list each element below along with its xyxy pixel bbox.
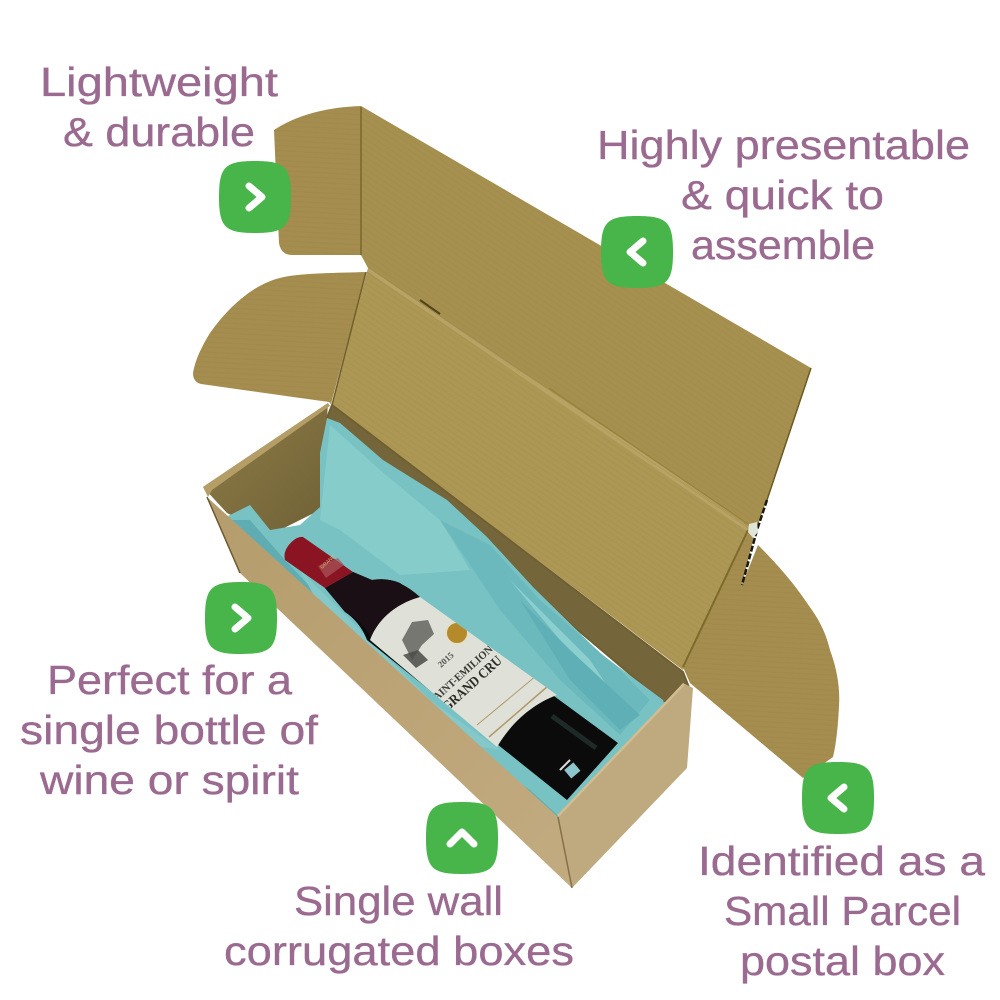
- bottle capsule: [284, 537, 353, 588]
- label text: corrugated boxes: [224, 928, 574, 974]
- label text: Small Parcel: [724, 888, 961, 934]
- cardboard box with wine bottle: [193, 106, 839, 888]
- icon: green left chevron button: [601, 216, 673, 288]
- tissue paper: [220, 418, 670, 830]
- label text: single bottle of: [20, 707, 319, 753]
- bottle highlights: [552, 716, 596, 778]
- label text: assemble: [691, 222, 875, 268]
- icon: green left chevron button: [802, 762, 874, 834]
- label text: & quick to: [681, 172, 884, 218]
- icon: green up chevron button: [426, 802, 498, 874]
- callout: highly presentable: [597, 122, 970, 288]
- lid lower panel: [332, 268, 750, 670]
- bottle body: [325, 572, 618, 800]
- callout: lightweight and durable: [40, 59, 291, 233]
- label name: AINT-EMILION: [431, 643, 496, 703]
- label text: Single wall: [294, 878, 503, 924]
- label text: wine or spirit: [39, 757, 300, 803]
- label appellation: GRAND CRU: [440, 654, 505, 715]
- callout: small parcel postal box: [698, 762, 985, 984]
- label text: [40, 59, 279, 155]
- interior back strip: [327, 405, 690, 702]
- back left tab: [274, 106, 361, 255]
- gold seal: [446, 622, 468, 644]
- label text: Lightweight: [40, 59, 279, 105]
- vintage year: 2015: [436, 650, 456, 669]
- left lower flap: [193, 272, 366, 404]
- callout: perfect for a single bottle: [20, 582, 319, 803]
- callout: single wall corrugated: [224, 802, 574, 974]
- label text: [20, 657, 319, 803]
- icon: green right chevron button: [205, 582, 277, 654]
- label text: Identified as a: [698, 838, 985, 884]
- bottle capsule: GRAND: [319, 554, 337, 570]
- label text: Highly presentable: [597, 122, 970, 168]
- right side flap: [683, 530, 839, 778]
- label drawing of chateau: [402, 620, 434, 668]
- right end wall: [558, 683, 693, 888]
- left wall rim: [203, 403, 330, 497]
- lid top panel: [361, 106, 811, 528]
- icon: green right chevron button: [219, 161, 291, 233]
- bottle label: [370, 597, 557, 747]
- bottle neck and shoulder: [325, 572, 420, 640]
- label text: [698, 838, 985, 984]
- label text: [597, 122, 970, 268]
- label text: [224, 878, 574, 974]
- label text: Perfect for a: [47, 657, 292, 703]
- label text: & durable: [63, 109, 255, 155]
- interior left wall: [203, 403, 328, 535]
- wine bottle: [284, 537, 618, 800]
- label text: postal box: [740, 938, 946, 984]
- slit and white tag: [742, 500, 767, 585]
- front long wall: [207, 497, 572, 888]
